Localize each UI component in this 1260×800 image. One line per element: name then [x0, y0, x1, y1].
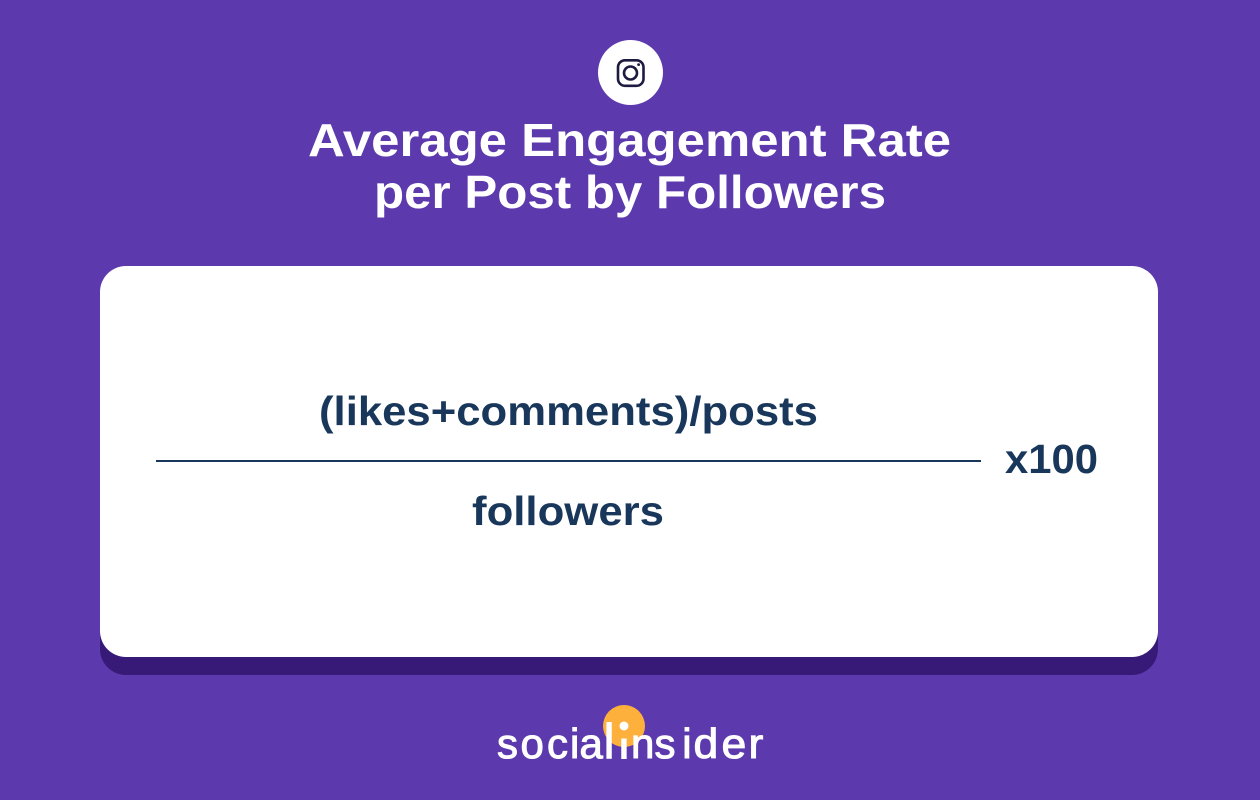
panel: formula card [100, 266, 1158, 675]
title [308, 114, 951, 218]
logo: socialinsider: socia [497, 720, 604, 767]
title: Average Engagement Rate [308, 114, 951, 166]
logo: socialinsider: l [604, 715, 614, 769]
logo: socialinsider: der [693, 721, 763, 768]
title: per Post by Followers [374, 166, 886, 218]
formula denominator: followers [472, 488, 664, 534]
multiplier: x100 [1005, 436, 1098, 482]
formula numerator: (likes+comments)/posts [319, 388, 818, 434]
logo: socialinsider: nsi [631, 720, 692, 767]
logo: socialinsider: i [620, 725, 628, 767]
logo: socialinsider [498, 705, 764, 759]
icon: instagram [598, 40, 663, 105]
formula fraction line [156, 460, 981, 462]
